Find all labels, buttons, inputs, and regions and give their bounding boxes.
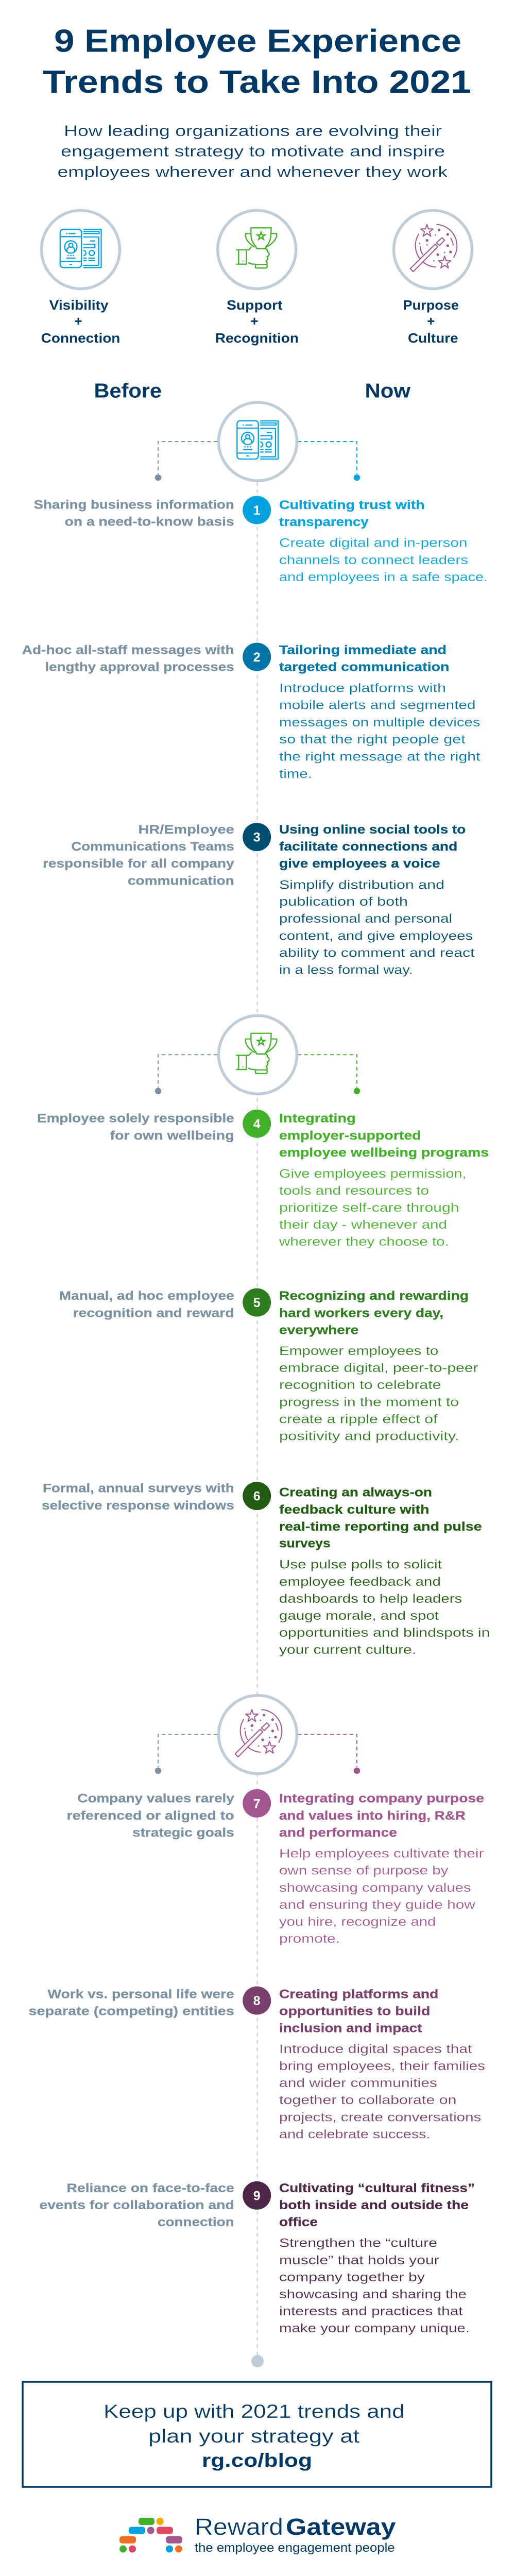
now text 9: Cultivating “cultural fitness” bbox=[279, 2181, 475, 2195]
before text 1: on a need-to-know basis bbox=[65, 515, 234, 529]
now text 7: and ensuring they guide how bbox=[279, 1898, 476, 1912]
now text 5: Recognizing and rewarding bbox=[279, 1289, 469, 1303]
now text 2: messages on multiple devices bbox=[279, 716, 480, 730]
before text 3: responsible for all company bbox=[43, 857, 234, 871]
now text 3: professional and personal bbox=[279, 912, 452, 926]
now text 4: tools and resources to bbox=[279, 1184, 429, 1198]
now text 9 bbox=[279, 2181, 475, 2335]
number badge 3 bbox=[243, 823, 271, 851]
now text 9: showcasing and sharing the bbox=[279, 2287, 467, 2301]
step 7 bbox=[67, 1789, 484, 1946]
pillar label: purpose + culture: Culture bbox=[408, 330, 458, 346]
now text 3: content, and give employees bbox=[279, 929, 473, 943]
pillar label: visibility + connection: Visibility bbox=[49, 297, 109, 313]
icon: magic wand bbox=[394, 210, 472, 289]
now text 9: make your company unique. bbox=[279, 2321, 470, 2335]
now text 2: targeted communication bbox=[279, 660, 449, 674]
now text 6: feedback culture with bbox=[279, 1503, 430, 1517]
now text 8: and wider communities bbox=[279, 2076, 437, 2090]
before text 5: Manual, ad hoc employee bbox=[59, 1289, 234, 1303]
number badge 2 bbox=[243, 643, 271, 671]
title: 9 Employee Experience bbox=[54, 23, 461, 59]
number badge 5: 5 bbox=[253, 1296, 261, 1310]
logo wordmark: Reward bbox=[195, 2514, 283, 2540]
now text 1: Cultivating trust with bbox=[279, 498, 425, 512]
now text 8: and celebrate success. bbox=[279, 2128, 431, 2142]
now text 2: mobile alerts and segmented bbox=[279, 699, 476, 712]
subtitle: How leading organizations are evolving their bbox=[64, 123, 442, 140]
before text 6 bbox=[42, 1482, 234, 1513]
now text 6: employee feedback and bbox=[279, 1575, 441, 1589]
now text 3: ability to comment and react bbox=[279, 946, 475, 960]
call to action box bbox=[23, 2382, 491, 2487]
number badge 4 bbox=[243, 1110, 271, 1138]
now text 4 bbox=[279, 1112, 489, 1249]
now text 5: progress in the moment to bbox=[279, 1395, 459, 1409]
pillar: support and recognition bbox=[215, 210, 299, 346]
before text 9: connection bbox=[158, 2215, 234, 2229]
now text 5: create a ripple effect of bbox=[279, 1412, 438, 1426]
step 4 bbox=[37, 1110, 489, 1249]
now text 2: Tailoring immediate and bbox=[279, 643, 447, 657]
now text 7: you hire, recognize and bbox=[279, 1915, 436, 1929]
number badge 7 bbox=[243, 1789, 271, 1818]
now text 4: prioritize self-care through bbox=[279, 1201, 459, 1215]
now text 4: Give employees permission, bbox=[279, 1167, 467, 1181]
number badge 9 bbox=[243, 2181, 271, 2210]
pillar label: visibility + connection bbox=[41, 297, 120, 346]
before text 8: Work vs. personal life were bbox=[47, 1987, 234, 2001]
subtitle: employees wherever and whenever they work bbox=[58, 164, 448, 181]
icon: trophy bbox=[218, 210, 296, 289]
section connector: visibility bbox=[155, 442, 360, 481]
pillar label: purpose + culture bbox=[403, 297, 459, 346]
pillar label: support + recognition: + bbox=[250, 313, 259, 329]
now text 1: transparency bbox=[279, 515, 369, 529]
before text 9: Reliance on face-to-face bbox=[67, 2181, 234, 2195]
number badge 7: 7 bbox=[253, 1797, 261, 1811]
before text 1 bbox=[34, 498, 234, 529]
step 1 bbox=[34, 496, 488, 584]
now text 4: employer-supported bbox=[279, 1129, 421, 1143]
now text 5: hard workers every day, bbox=[279, 1306, 443, 1320]
now text 4: wherever they choose to. bbox=[279, 1235, 449, 1249]
now text 8: projects, create conversations bbox=[279, 2110, 481, 2125]
before text 2 bbox=[22, 643, 234, 674]
number badge 2: 2 bbox=[253, 650, 261, 665]
number badge 6: 6 bbox=[253, 1489, 261, 1504]
before text 6: Formal, annual surveys with bbox=[43, 1482, 234, 1496]
before text 8: separate (competing) entities bbox=[29, 2004, 234, 2018]
number badge 1 bbox=[243, 496, 271, 524]
column heading: now: Now bbox=[365, 380, 411, 402]
now text 6: Use pulse polls to solicit bbox=[279, 1558, 442, 1572]
pillar label: support + recognition bbox=[215, 297, 299, 346]
section connector: purpose bbox=[155, 1735, 360, 1774]
pillar label: visibility + connection: Connection bbox=[41, 330, 120, 346]
section icon: magic wand bbox=[218, 1696, 297, 1774]
now text 6 bbox=[279, 1486, 490, 1657]
icon: phone and document bbox=[41, 210, 119, 289]
pillar: visibility and connection bbox=[41, 210, 120, 346]
now text 5: embrace digital, peer-to-peer bbox=[279, 1361, 478, 1375]
number badge 3: 3 bbox=[253, 831, 261, 845]
now text 6: gauge morale, and spot bbox=[279, 1609, 439, 1623]
step 3 bbox=[43, 823, 475, 977]
section connector: support bbox=[155, 1055, 360, 1094]
now text 1: Create digital and in-person bbox=[279, 536, 468, 550]
now text 2: the right message at the right bbox=[279, 750, 480, 764]
now text 9: company together by bbox=[279, 2270, 425, 2284]
now text 4: their day - whenever and bbox=[279, 1218, 447, 1232]
now text 8: together to collaborate on bbox=[279, 2093, 456, 2107]
before text 5 bbox=[59, 1289, 234, 1320]
now text 3: Simplify distribution and bbox=[279, 878, 444, 892]
logo wordmark bbox=[195, 2514, 396, 2555]
now text 9: Strengthen the “culture bbox=[279, 2236, 437, 2250]
now text 5: Empower employees to bbox=[279, 1344, 438, 1358]
section icon: trophy bbox=[218, 1015, 297, 1094]
now text 1 bbox=[279, 498, 488, 584]
before text 3: communication bbox=[128, 874, 234, 888]
before text 3: Communications Teams bbox=[71, 840, 234, 854]
now text 7: Help employees cultivate their bbox=[279, 1846, 484, 1861]
number badge 9: 9 bbox=[253, 2189, 261, 2203]
before text 2: lengthy approval processes bbox=[45, 660, 234, 674]
now text 3: in a less formal way. bbox=[279, 963, 413, 977]
before text 3: HR/Employee bbox=[138, 823, 234, 837]
before text 9: events for collaboration and bbox=[39, 2198, 234, 2212]
now text 1: channels to connect leaders bbox=[279, 553, 468, 567]
pillar label: support + recognition: Support bbox=[227, 297, 283, 313]
now text 2: so that the right people get bbox=[279, 733, 466, 747]
now text 6: opportunities and blindspots in bbox=[279, 1626, 490, 1640]
pillar label: purpose + culture: + bbox=[427, 313, 435, 329]
title: Trends to Take Into 2021 bbox=[43, 64, 471, 100]
now text 8: bring employees, their families bbox=[279, 2059, 485, 2073]
now text 8: inclusion and impact bbox=[279, 2022, 422, 2036]
now text 7: own sense of purpose by bbox=[279, 1864, 448, 1877]
before text 9 bbox=[39, 2181, 234, 2229]
timeline end dot bbox=[251, 2355, 264, 2367]
step 5 bbox=[59, 1288, 478, 1444]
before text 2: Ad-hoc all-staff messages with bbox=[22, 643, 234, 657]
step 9 bbox=[39, 2181, 475, 2335]
number badge 1: 1 bbox=[253, 503, 261, 518]
title bbox=[43, 23, 471, 100]
logo wordmark: the employee engagement people bbox=[195, 2541, 395, 2555]
now text 2: Introduce platforms with bbox=[279, 681, 446, 695]
now text 8: Creating platforms and bbox=[279, 1987, 438, 2001]
now text 9: muscle” that holds your bbox=[279, 2253, 439, 2267]
now text 2: time. bbox=[279, 767, 312, 781]
before text 4: for own wellbeing bbox=[110, 1129, 234, 1143]
now text 1: and employees in a safe space. bbox=[279, 570, 488, 584]
number badge 8 bbox=[243, 1987, 271, 2014]
section icon: phone and document bbox=[218, 402, 297, 481]
now text 7: promote. bbox=[279, 1932, 340, 1946]
subtitle bbox=[58, 123, 448, 181]
now text 3: publication of both bbox=[279, 895, 408, 909]
step 2 bbox=[22, 643, 480, 781]
now text 5 bbox=[279, 1289, 478, 1444]
pillar label: visibility + connection: + bbox=[74, 313, 82, 329]
pillar: purpose and culture bbox=[394, 210, 472, 346]
call to action text: Keep up with 2021 trends and bbox=[104, 2401, 405, 2422]
before text 7: strategic goals bbox=[132, 1826, 234, 1840]
now text 2 bbox=[279, 643, 480, 781]
column heading: before: Before bbox=[94, 380, 162, 402]
before text 5: recognition and reward bbox=[73, 1306, 234, 1320]
now text 7: and values into hiring, R&R bbox=[279, 1809, 466, 1823]
now text 5: recognition to celebrate bbox=[279, 1378, 441, 1392]
now text 6: your current culture. bbox=[279, 1643, 416, 1657]
now text 6: Creating an always-on bbox=[279, 1486, 432, 1500]
now text 9: office bbox=[279, 2215, 318, 2229]
call to action text bbox=[104, 2401, 405, 2471]
before text 7: Company values rarely bbox=[77, 1792, 234, 1806]
now text 7: showcasing company values bbox=[279, 1881, 471, 1895]
before text 4: Employee solely responsible bbox=[37, 1112, 234, 1125]
call to action text: rg.co/blog bbox=[202, 2450, 312, 2471]
now text 3: facilitate connections and bbox=[279, 840, 457, 854]
logo mark bbox=[119, 2518, 182, 2552]
now text 3: Using online social tools to bbox=[279, 823, 466, 837]
pillar label: purpose + culture: Purpose bbox=[403, 297, 459, 313]
pillar label: support + recognition: Recognition bbox=[215, 330, 299, 346]
now text 6: real-time reporting and pulse bbox=[279, 1520, 482, 1534]
logo wordmark: Gateway bbox=[286, 2514, 396, 2540]
now text 8: opportunities to build bbox=[279, 2004, 431, 2018]
now text 3: give employees a voice bbox=[279, 857, 440, 871]
number badge 8: 8 bbox=[253, 1994, 261, 2008]
number badge 4: 4 bbox=[253, 1117, 261, 1131]
subtitle: engagement strategy to motivate and inspire bbox=[61, 143, 445, 160]
now text 4: Integrating bbox=[279, 1112, 356, 1125]
now text 7: and performance bbox=[279, 1826, 397, 1840]
now text 4: employee wellbeing programs bbox=[279, 1146, 489, 1160]
now text 6: dashboards to help leaders bbox=[279, 1592, 462, 1606]
logo: Reward Gateway bbox=[119, 2514, 396, 2555]
before text 4 bbox=[37, 1112, 234, 1143]
now text 9: interests and practices that bbox=[279, 2304, 463, 2318]
before text 6: selective response windows bbox=[42, 1499, 234, 1513]
now text 9: both inside and outside the bbox=[279, 2198, 469, 2212]
now text 8 bbox=[279, 1987, 485, 2142]
now text 5: positivity and productivity. bbox=[279, 1430, 459, 1444]
call to action text: plan your strategy at bbox=[148, 2426, 360, 2447]
before text 8 bbox=[29, 1987, 234, 2018]
number badge 6 bbox=[243, 1482, 271, 1510]
central timeline bbox=[256, 482, 258, 2355]
now text 7 bbox=[279, 1792, 484, 1946]
now text 8: Introduce digital spaces that bbox=[279, 2042, 472, 2056]
step 6 bbox=[42, 1482, 490, 1657]
before text 1: Sharing business information bbox=[34, 498, 234, 512]
now text 7: Integrating company purpose bbox=[279, 1792, 484, 1806]
now text 5: everywhere bbox=[279, 1324, 358, 1337]
now text 3 bbox=[279, 823, 475, 977]
now text 6: surveys bbox=[279, 1536, 331, 1551]
step 8 bbox=[29, 1987, 485, 2142]
before text 3 bbox=[43, 823, 234, 888]
before text 7 bbox=[67, 1792, 234, 1840]
number badge 5 bbox=[243, 1288, 271, 1317]
before text 7: referenced or aligned to bbox=[67, 1809, 234, 1823]
